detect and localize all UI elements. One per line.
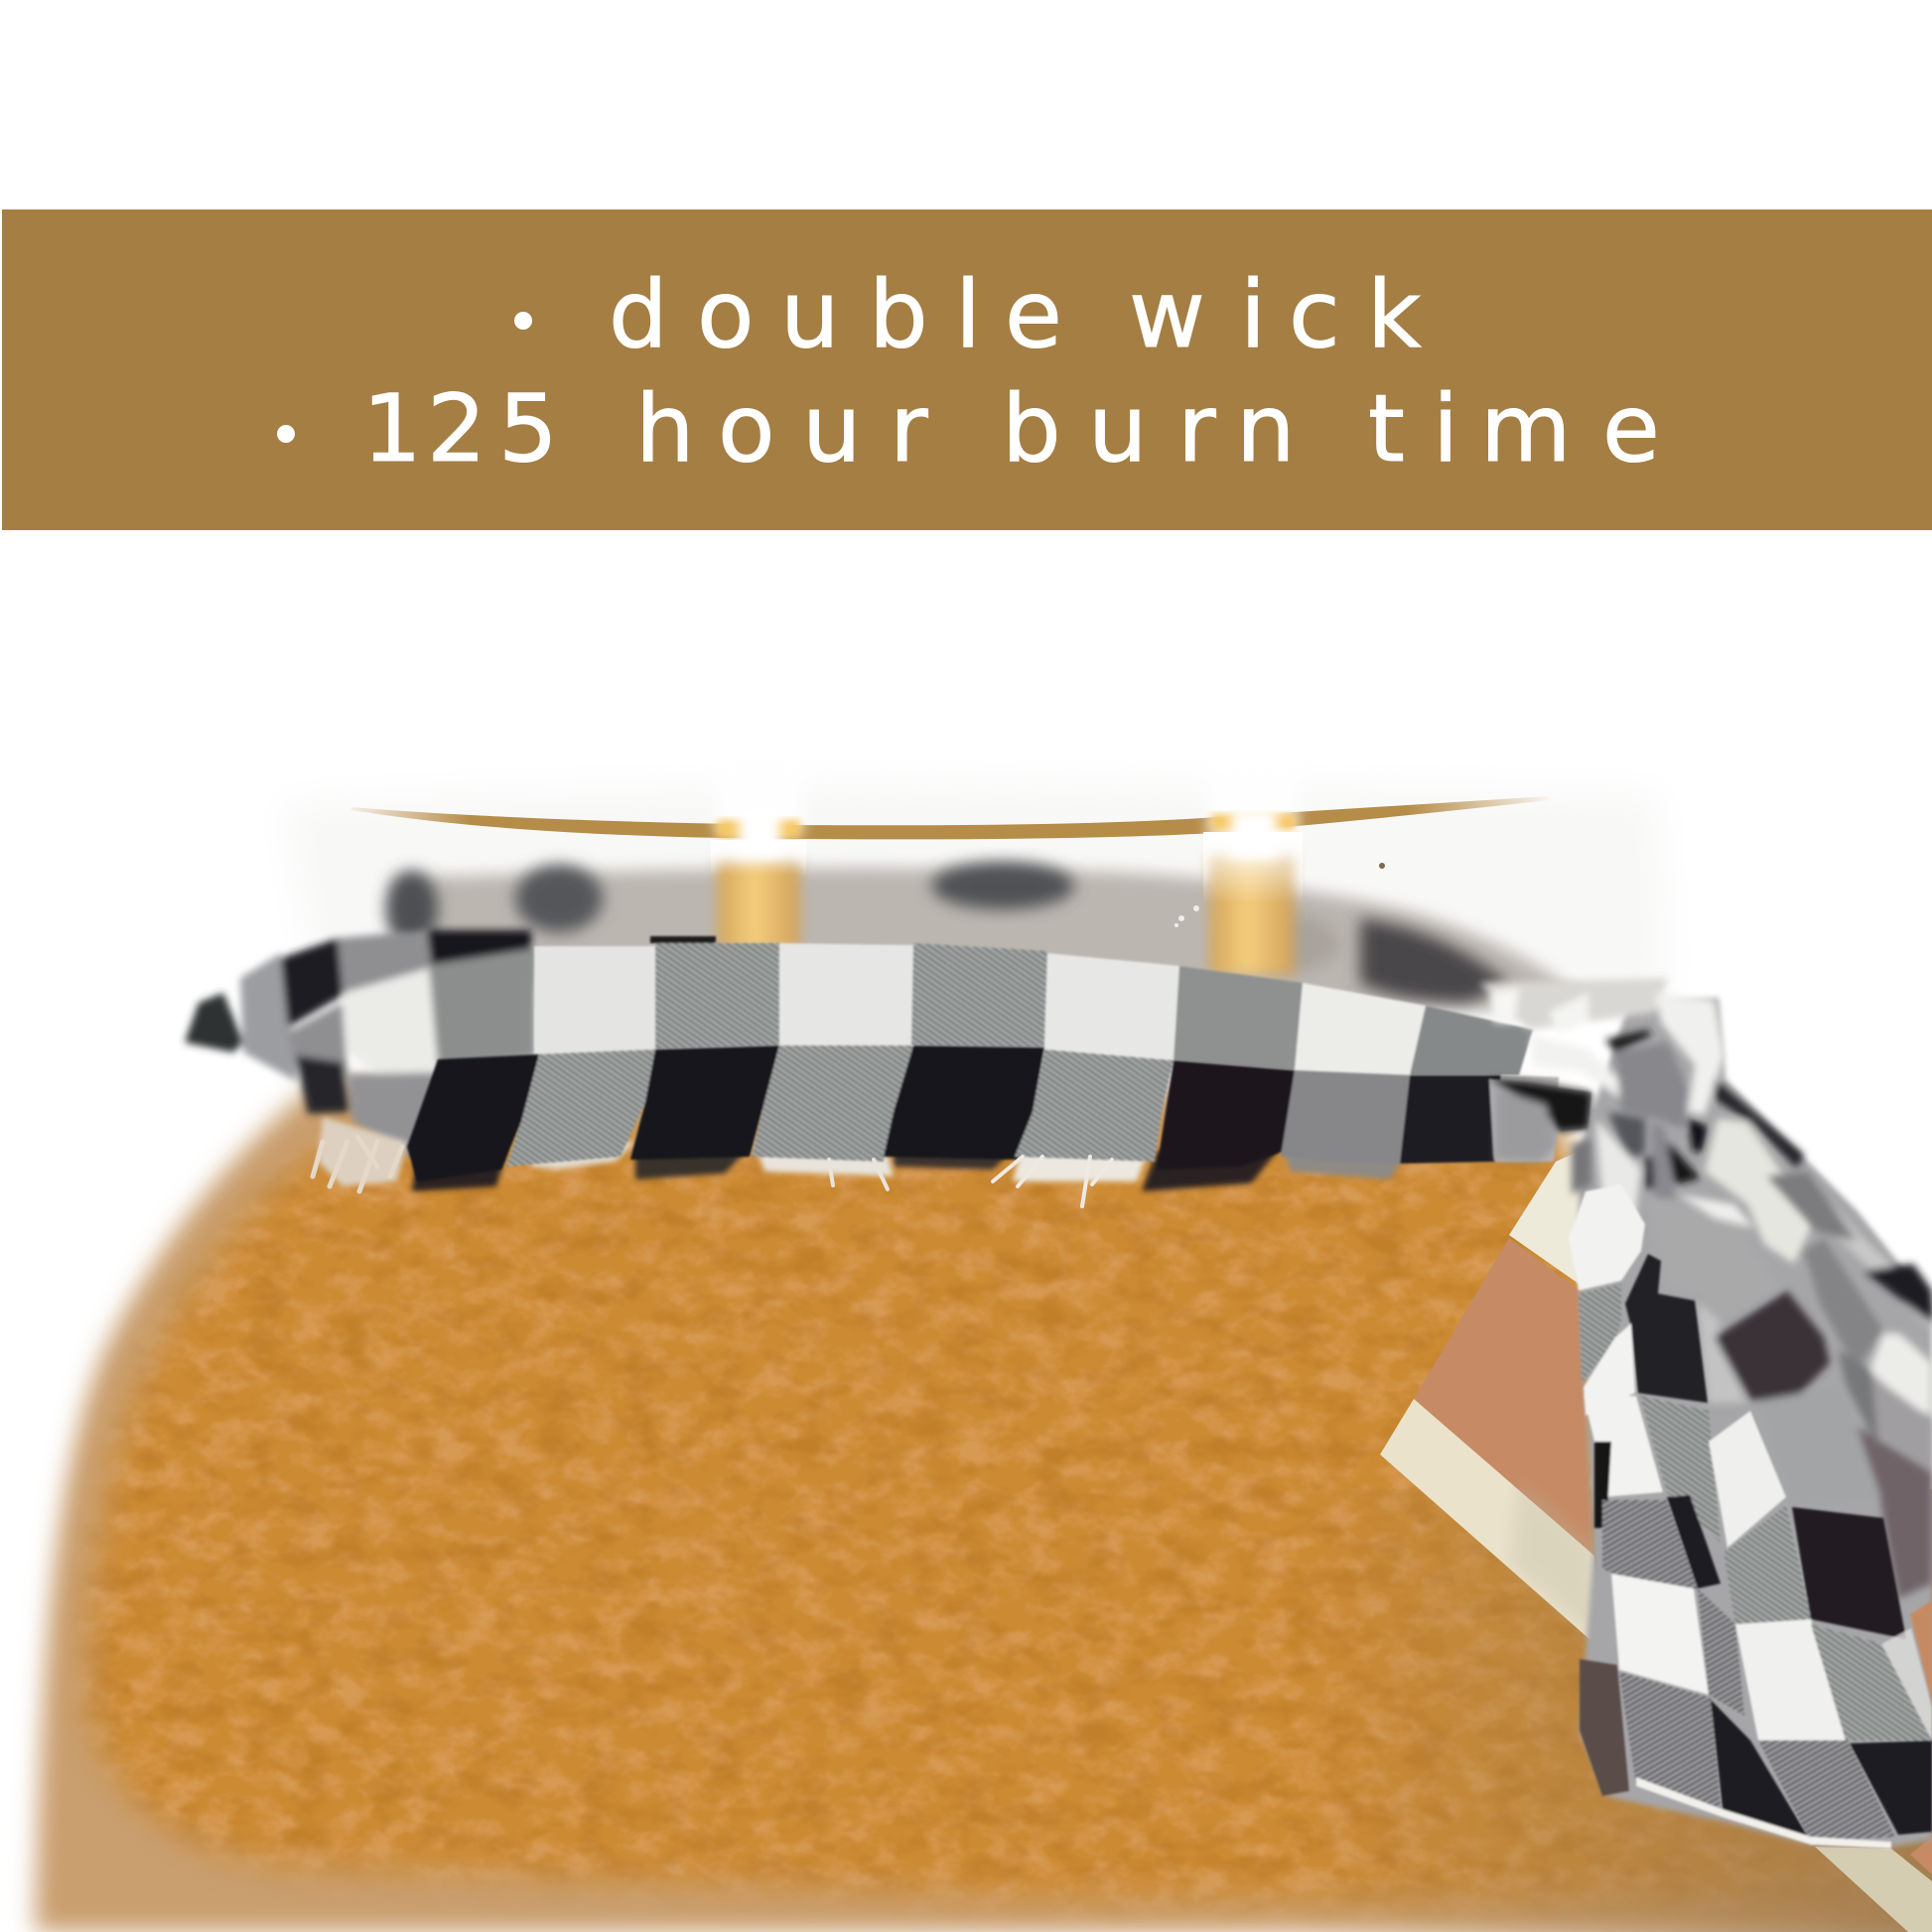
soot and wax residue behind glass <box>386 862 1588 1013</box>
back tail checks <box>1645 1169 1932 1598</box>
bullet dots <box>277 312 532 443</box>
right flame <box>1203 755 1303 975</box>
left flame <box>711 695 806 949</box>
frayed threads <box>313 1137 1112 1206</box>
banner: product features <box>2 209 1932 530</box>
ribbon lower row <box>407 1045 1591 1181</box>
gingham ribbon band <box>185 930 1591 1206</box>
ribbon knot <box>1479 978 1814 1264</box>
feature text: 125 hour burn time: 125 hour burn time <box>362 375 1660 483</box>
candle jar photo <box>0 695 1932 1932</box>
gold rim of glass <box>351 796 1549 839</box>
hang tag <box>1380 1147 1932 1932</box>
ribbon top edge row <box>534 936 1533 1075</box>
ribbon left blurred end <box>185 930 536 1157</box>
wax body <box>0 993 1932 1932</box>
glass jar top <box>283 695 1668 1013</box>
feature text: double wick: double wick <box>609 261 1422 369</box>
ribbon tail base <box>1579 998 1932 1847</box>
ribbon frayed edge under the band <box>318 1117 1410 1191</box>
front tail checks <box>1569 1184 1932 1849</box>
ribbon knot and tails <box>1479 978 1932 1849</box>
